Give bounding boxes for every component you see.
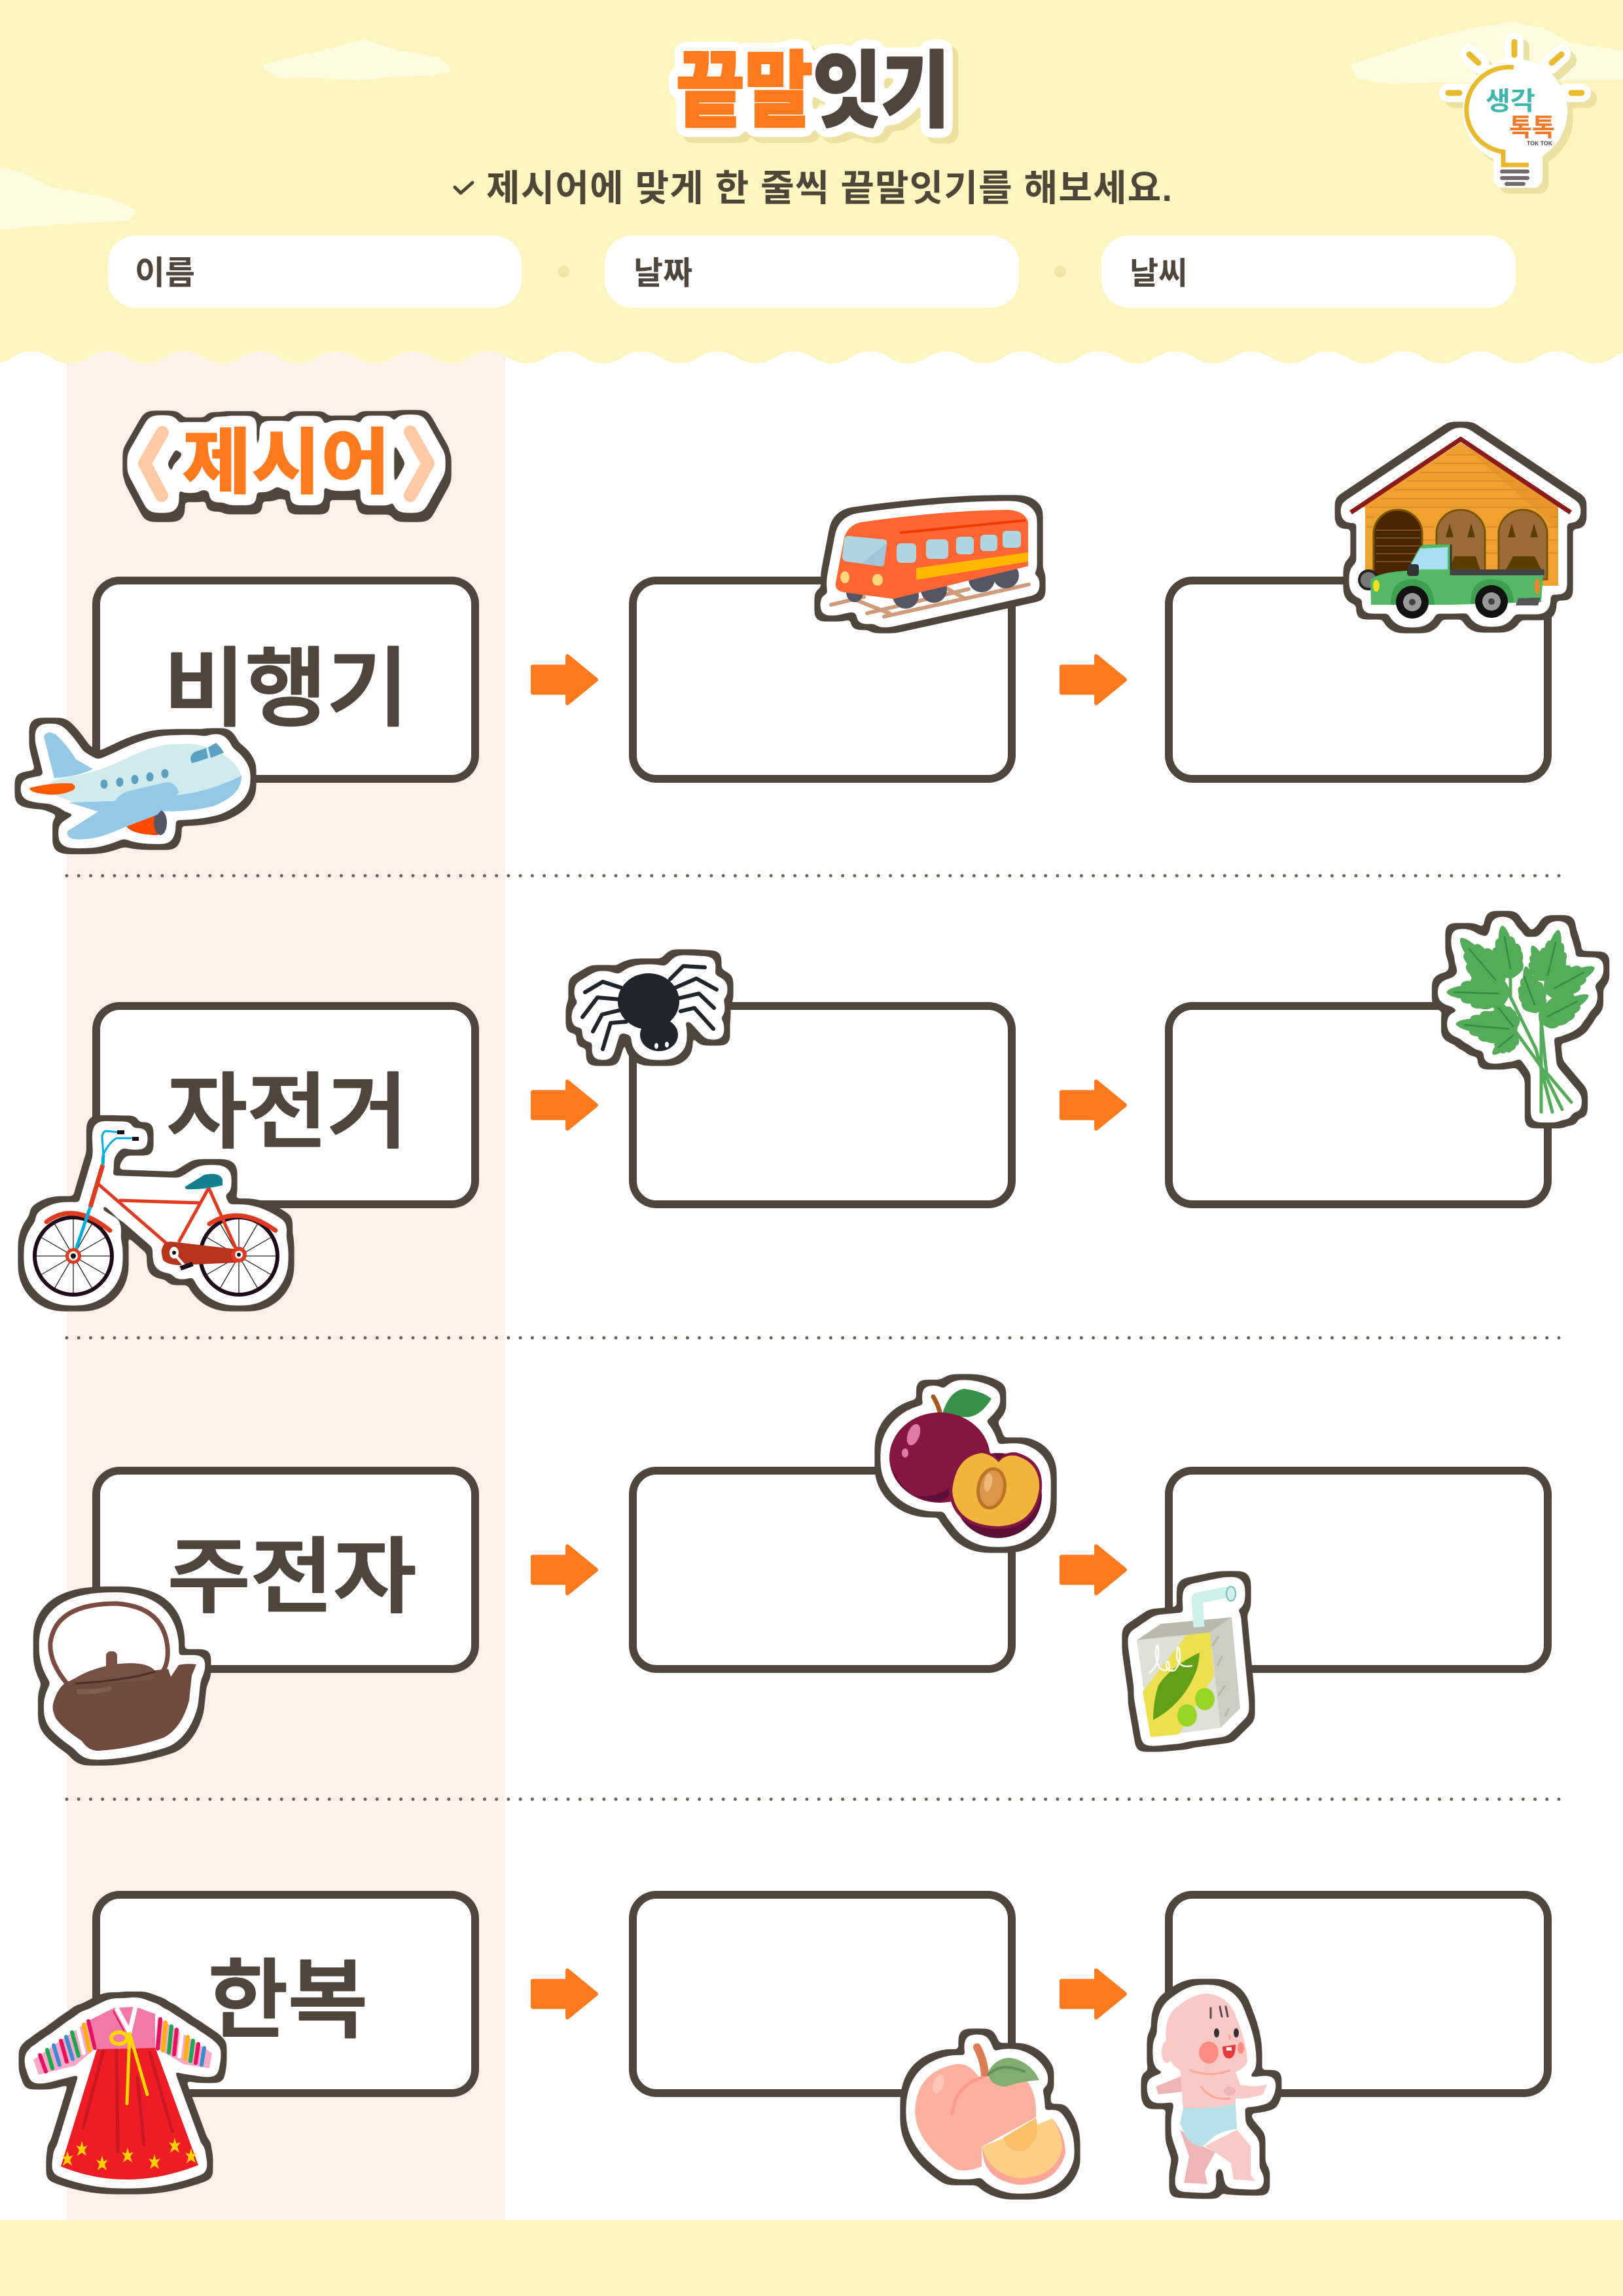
heading: keyword sign: 제시어 [182,423,390,503]
left keyword column background [67,327,505,2220]
row 4: keyword box: 한복 [208,1952,368,2049]
row 3: keyword box: 주전자 [168,1531,416,1623]
clouds [0,25,1623,227]
row 2: answer box 1 [633,1006,1012,1204]
weather field [1101,236,1516,308]
icon: hanbok sticker [33,2007,212,2179]
footer band [0,2220,1623,2296]
row 3: arrow 1 [533,1546,596,1593]
row 3: answer box 2 [1169,1471,1548,1669]
row 1: keyword box [96,581,475,779]
icon: train sticker [831,510,1029,617]
icon: baby sticker [1156,1994,1267,2184]
icon: airplane sticker [29,732,241,839]
weather field: 날씨 [1130,257,1187,291]
name field [108,236,522,308]
row 4: answer box 1 [633,1895,1012,2093]
header background with scalloped edge [0,0,1623,363]
row 4: arrow 1 [533,1970,596,2017]
icon: teapot sticker [50,1604,196,1751]
row 1: answer box 1 [633,581,1012,779]
bulb white [1448,42,1582,188]
row 1: arrow 2 [1061,656,1125,703]
row 3: answer box 1 [633,1471,1012,1669]
row 4: answer box 2 [1169,1895,1548,2093]
row 2: arrow 2 [1061,1081,1125,1128]
logo: light bulb: 톡톡 [1509,115,1555,142]
row 3: keyword box [96,1471,475,1669]
icon: parsley sticker [1449,925,1599,1112]
row 4: keyword box [96,1895,475,2093]
title: 끝말잇기 [676,45,950,137]
row 2: arrow 1 [533,1081,596,1128]
row 2: keyword box [96,1006,475,1204]
row 2: keyword box: 자전거 [167,1066,408,1158]
logo: light bulb: TOK TOK [1527,140,1552,147]
icon: spider sticker [582,966,717,1051]
name field: 이름 [135,255,195,291]
instruction text: 제시어에 맞게 한 줄씩 끝말잇기를 해보세요. [486,168,1172,209]
icon: peach sticker [915,2047,1065,2185]
row 1: answer box 2 [1169,581,1548,779]
date field [605,236,1019,308]
row 3: arrow 2 [1061,1546,1125,1593]
icon: juice box sticker [1137,1587,1240,1737]
icon: bicycle sticker [33,1131,279,1296]
instruction line [455,168,1172,209]
icon: plum sticker [889,1389,1042,1538]
icon: train station and truck sticker [1351,439,1571,619]
row 1: keyword box: 비행기 [164,641,408,737]
row 4: arrow 2 [1061,1970,1125,2017]
row 1: arrow 1 [533,656,596,703]
logo: light bulb: 생각 [1486,88,1535,116]
bulb shadow [1454,48,1588,194]
logo: light bulb [1448,42,1588,194]
icon: check mark [455,183,473,193]
date field: 날짜 [633,256,692,291]
row 2: answer box 2 [1169,1006,1548,1204]
